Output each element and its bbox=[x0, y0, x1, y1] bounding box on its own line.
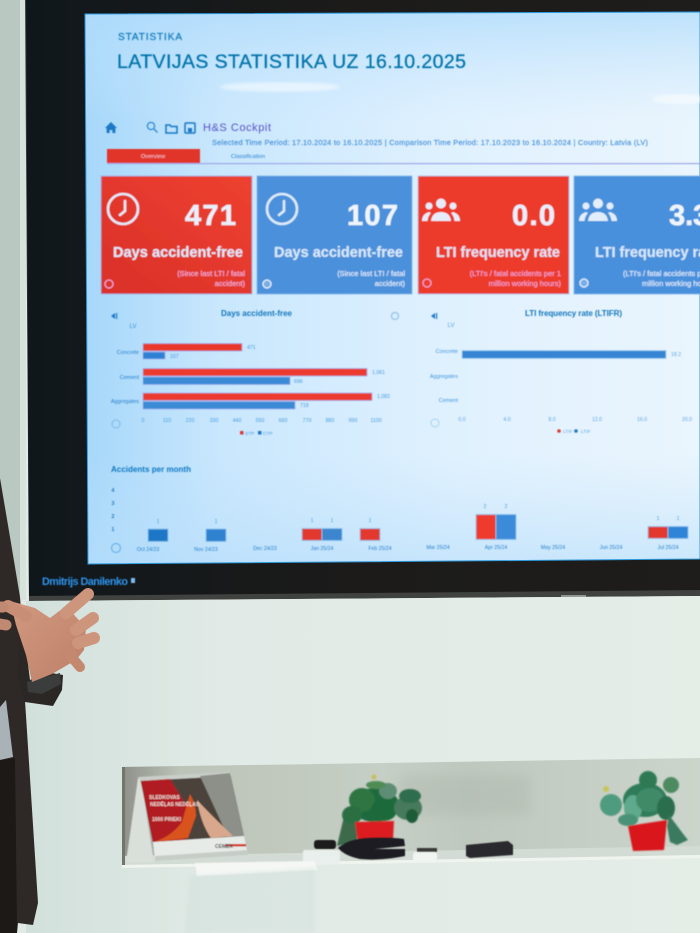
KPI card: days accident-free, blue bbox=[257, 176, 412, 294]
desk calendar bbox=[126, 772, 248, 862]
presenter: gesturing hand bbox=[0, 594, 94, 682]
calendar slogan bbox=[149, 795, 200, 823]
KPI card: LTI frequency rate, red bbox=[418, 176, 569, 294]
plant in red pot, right bbox=[600, 771, 688, 851]
bar chart: days accident-free: 1,082 bbox=[377, 394, 390, 400]
bar chart: LTI frequency rate: 16.0 bbox=[637, 417, 647, 423]
calendar slogan: 1000 PRIEKI bbox=[152, 817, 182, 823]
cockpit title: H&S Cockpit bbox=[203, 122, 271, 134]
bar chart: days accident-free: 1100 bbox=[370, 418, 382, 424]
column chart: accidents per month: 1 bbox=[215, 519, 218, 525]
column chart: accidents per month: Jul 25/24 bbox=[657, 545, 679, 551]
dashboard screen bbox=[85, 12, 700, 564]
bar chart: days accident-free: 110 bbox=[163, 418, 171, 424]
icon: people bbox=[579, 198, 617, 221]
bar chart: LTI frequency rate bbox=[430, 309, 692, 435]
KPI card: days accident-free, red bbox=[101, 176, 252, 294]
column chart: accidents per month: May 25/24 bbox=[541, 545, 565, 551]
bar chart: days accident-free: CTP bbox=[263, 431, 273, 437]
column chart: accidents per month: 1 bbox=[157, 519, 160, 525]
KPI card: days accident-free, red: accident) bbox=[215, 279, 245, 288]
bar chart: LTI frequency rate: LTIF bbox=[563, 429, 573, 435]
column chart: accidents per month: 3 bbox=[112, 501, 115, 507]
calendar slogan: NEDĒĻAS NEDĒĻAS bbox=[150, 801, 200, 808]
bar chart: days accident-free: 471 bbox=[247, 345, 256, 351]
bar chart: LTI frequency rate: LV bbox=[448, 323, 454, 329]
column chart: accidents per month: Accidents per month bbox=[111, 465, 191, 474]
lower wall bbox=[26, 596, 700, 933]
page heading bbox=[117, 32, 466, 73]
bar chart: days accident-free: 440 bbox=[233, 418, 241, 424]
tabs bbox=[107, 149, 700, 164]
bar chart: LTI frequency rate: 4.0 bbox=[503, 417, 511, 423]
KPI card: days accident-free, blue: Days accident-free bbox=[274, 245, 403, 261]
KPI card: LTI frequency rate, red: LTI frequency rate bbox=[436, 245, 560, 261]
bar chart: days accident-free: Days accident-free bbox=[221, 309, 293, 318]
bar chart: LTI frequency rate: LTIF bbox=[581, 429, 591, 435]
bar chart: days accident-free: 107 bbox=[170, 354, 179, 360]
stapler and shelf objects bbox=[185, 838, 513, 933]
column chart: accidents per month: Apr 25/24 bbox=[485, 545, 507, 551]
page heading: LATVIJAS STATISTIKA UZ 16.10.2025 bbox=[117, 51, 466, 73]
bar chart: days accident-free: Concrete bbox=[117, 350, 139, 356]
icon: clock bbox=[267, 194, 297, 224]
column chart: accidents per month: Nov 24/23 bbox=[194, 547, 218, 553]
bar chart: LTI frequency rate: 8.0 bbox=[548, 417, 556, 423]
KPI card: LTI frequency rate, red: 0.0 bbox=[512, 200, 555, 232]
icon: home bbox=[105, 122, 117, 133]
bar chart: LTI frequency rate: 12.0 bbox=[592, 417, 602, 423]
calendar slogan: SLEDKOVAS bbox=[149, 795, 180, 801]
column chart: accidents per month: Dec 24/23 bbox=[253, 546, 277, 552]
bar chart: LTI frequency rate: 0.0 bbox=[458, 417, 466, 423]
bar chart: days accident-free: 696 bbox=[294, 379, 303, 385]
bar chart: days accident-free: 0 bbox=[142, 418, 145, 424]
column chart: accidents per month: Jun 25/24 bbox=[600, 545, 623, 551]
bar chart: days accident-free: 770 bbox=[303, 418, 311, 424]
column chart: accidents per month: 1 bbox=[331, 518, 334, 524]
bar chart: days accident-free: LV bbox=[130, 324, 136, 330]
bar chart: days accident-free bbox=[111, 309, 398, 437]
screen share name label: Dmitrijs Danilenko bbox=[42, 576, 128, 588]
bar chart: LTI frequency rate: 20.0 bbox=[682, 417, 692, 423]
KPI card: days accident-free, blue: 107 bbox=[347, 200, 398, 232]
other hand fingertips bbox=[0, 607, 6, 625]
column chart: accidents per month: Jan 25/24 bbox=[311, 546, 334, 552]
cockpit toolbar bbox=[105, 122, 648, 147]
bar chart: days accident-free: STP bbox=[245, 431, 254, 437]
bar chart: days accident-free: 550 bbox=[256, 418, 264, 424]
column chart: accidents per month: 2 bbox=[505, 504, 508, 510]
icon: folder bbox=[166, 125, 177, 133]
bar chart: days accident-free: 330 bbox=[210, 418, 218, 424]
KPI card: LTI frequency rate, red: (LTI's / fatal accidents per 1 bbox=[470, 269, 561, 278]
bar chart: days accident-free: 880 bbox=[326, 418, 334, 424]
column chart: accidents per month: 4 bbox=[112, 488, 115, 494]
bar chart: days accident-free: 718 bbox=[300, 403, 309, 409]
column chart: accidents per month: 1 bbox=[112, 527, 115, 533]
KPI card: days accident-free, red: 471 bbox=[185, 200, 236, 232]
bar chart: LTI frequency rate: Aggregates bbox=[430, 374, 458, 380]
column chart: accidents per month bbox=[111, 465, 688, 553]
bar chart: LTI frequency rate: 18.2 bbox=[671, 352, 681, 358]
KPI card: days accident-free, red: Days accident-free bbox=[113, 245, 243, 261]
bar chart: days accident-free: 990 bbox=[349, 418, 357, 424]
icon: save bbox=[185, 123, 195, 133]
bar chart: days accident-free: 220 bbox=[186, 418, 194, 424]
column chart: accidents per month: 1 bbox=[677, 516, 680, 522]
KPI card: LTI frequency rate, red: million working hours) bbox=[488, 279, 561, 288]
column chart: accidents per month: 2 bbox=[112, 514, 115, 520]
icon: people bbox=[422, 198, 460, 221]
bar chart: LTI frequency rate: Concrete bbox=[436, 349, 458, 355]
KPI card: days accident-free, blue: accident) bbox=[375, 279, 405, 288]
column chart: accidents per month: 1 bbox=[369, 518, 372, 524]
column chart: accidents per month: Mar 25/24 bbox=[426, 545, 450, 551]
KPI card: LTI frequency rate, blue bbox=[574, 176, 700, 294]
tabs: Classification bbox=[231, 154, 265, 160]
bar chart: LTI frequency rate: LTI frequency rate (LTIFR) bbox=[525, 309, 622, 318]
column chart: accidents per month: 1 bbox=[311, 518, 314, 524]
shelf niche bbox=[122, 758, 700, 868]
icon: clock bbox=[108, 194, 138, 224]
column chart: accidents per month: Oct 24/23 bbox=[137, 547, 159, 553]
page heading: STATISTIKA bbox=[118, 32, 182, 43]
icon: search bbox=[147, 122, 158, 132]
bar chart: days accident-free: Aggregates bbox=[111, 399, 139, 405]
plant in red pot, left bbox=[337, 774, 422, 846]
jacket sleeve and cuff bbox=[18, 600, 63, 706]
KPI card: days accident-free, red: (Since last LTI / fatal bbox=[177, 269, 245, 278]
column chart: accidents per month: 2 bbox=[484, 504, 487, 510]
desk calendar: CEMEX bbox=[215, 844, 233, 850]
bar chart: days accident-free: 660 bbox=[279, 418, 287, 424]
bar chart: days accident-free: Cement bbox=[120, 375, 139, 381]
selected time period line: Selected Time Period: 17.10.2024 to 16.10.2025 | Comparison Time Period: 17.10.2023 to 16.10.2024 | Country: Latvia (LV) bbox=[212, 138, 648, 147]
wall display monitor bbox=[25, 0, 700, 601]
column chart: accidents per month: 1 bbox=[657, 516, 660, 522]
tabs: Overview bbox=[141, 154, 166, 160]
bar chart: days accident-free: 1,061 bbox=[372, 370, 385, 376]
KPI card: days accident-free, blue: (Since last LTI / fatal bbox=[337, 269, 405, 278]
presenter: dark jacket and shirt bbox=[0, 478, 63, 933]
bar chart: LTI frequency rate: Cement bbox=[439, 398, 458, 404]
column chart: accidents per month: Feb 25/24 bbox=[368, 546, 392, 552]
